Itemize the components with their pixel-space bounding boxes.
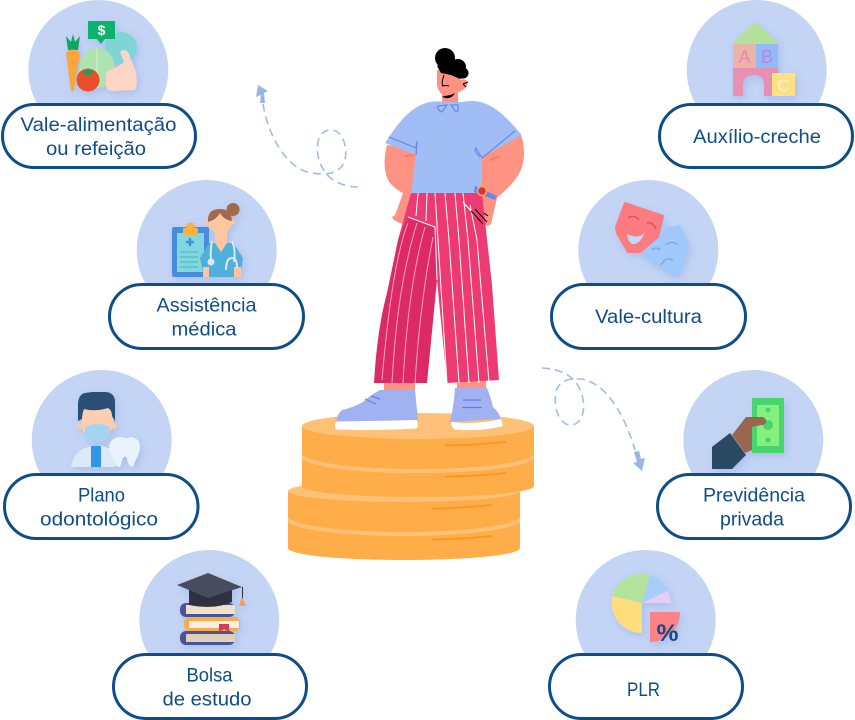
- arrow: dashed arrow down-right: [542, 368, 645, 471]
- icon: pie chart with percent: %: [656, 620, 678, 647]
- item: Auxílio-creche: [660, 0, 852, 168]
- label text: Auxílio-creche: [693, 126, 821, 148]
- pants right leg: [398, 193, 499, 383]
- label text: Previdência: [703, 484, 805, 506]
- pants left leg: [374, 217, 437, 383]
- left shoe: [335, 389, 418, 430]
- watch: [474, 186, 497, 200]
- label pill: [110, 284, 304, 348]
- left arm: [385, 145, 420, 224]
- right shoe: [450, 388, 503, 430]
- icon: graduation cap on books: [177, 573, 246, 645]
- label pill: [4, 474, 198, 538]
- label text: médica: [172, 318, 237, 340]
- label text: Assistência: [156, 294, 257, 316]
- item: Vale-alimentação ou refeição: [2, 0, 196, 168]
- upper coins: [302, 413, 534, 497]
- neck and face: [437, 68, 468, 104]
- icon: dentist and tooth: [71, 392, 140, 467]
- item: Assistência médica: [110, 180, 304, 348]
- label text: ou refeição: [46, 138, 146, 160]
- label pill: [660, 104, 852, 168]
- icon: food and money: $: [98, 22, 106, 38]
- icon: nurse and clipboard: [172, 203, 243, 277]
- item: Vale-cultura: [552, 180, 746, 348]
- hair: [435, 48, 468, 98]
- icon: toy blocks: [733, 22, 795, 96]
- label text: privada: [720, 508, 784, 530]
- label text: Plano: [78, 484, 125, 506]
- label text: de estudo: [162, 688, 252, 710]
- label text: odontológico: [40, 508, 158, 530]
- icon: food and money: [66, 21, 137, 92]
- label pill: [658, 474, 850, 538]
- icon: toy blocks: B: [761, 47, 773, 67]
- item: Plano odontológico: [4, 370, 198, 538]
- item: PLR: [550, 550, 742, 718]
- right arm: [470, 135, 524, 226]
- item: Bolsa de estudo: [114, 550, 306, 718]
- lower coins: [288, 480, 520, 560]
- pants stripes: [382, 193, 489, 383]
- icon: toy blocks: C: [777, 76, 790, 95]
- icon: toy blocks: A: [738, 47, 751, 67]
- icon: pie chart with percent: [612, 574, 680, 647]
- character: [335, 48, 524, 430]
- label text: Vale-alimentação: [20, 114, 177, 136]
- arrow: dashed arrow up-left: [256, 85, 358, 187]
- label text: Vale-cultura: [595, 306, 702, 328]
- legs skin: [384, 380, 486, 392]
- icon: hand holding money: [712, 398, 784, 469]
- fingers: [471, 209, 488, 224]
- coin stack: [288, 413, 534, 560]
- item: Previdência privada: [658, 370, 850, 538]
- icon: theater masks: [616, 203, 688, 276]
- label pill: [552, 284, 746, 348]
- label pill: [2, 104, 196, 168]
- shirt: [385, 101, 522, 193]
- label text: PLR: [627, 679, 660, 701]
- label pill: [114, 654, 306, 718]
- label text: Bolsa: [186, 664, 233, 686]
- label pill: [550, 654, 742, 718]
